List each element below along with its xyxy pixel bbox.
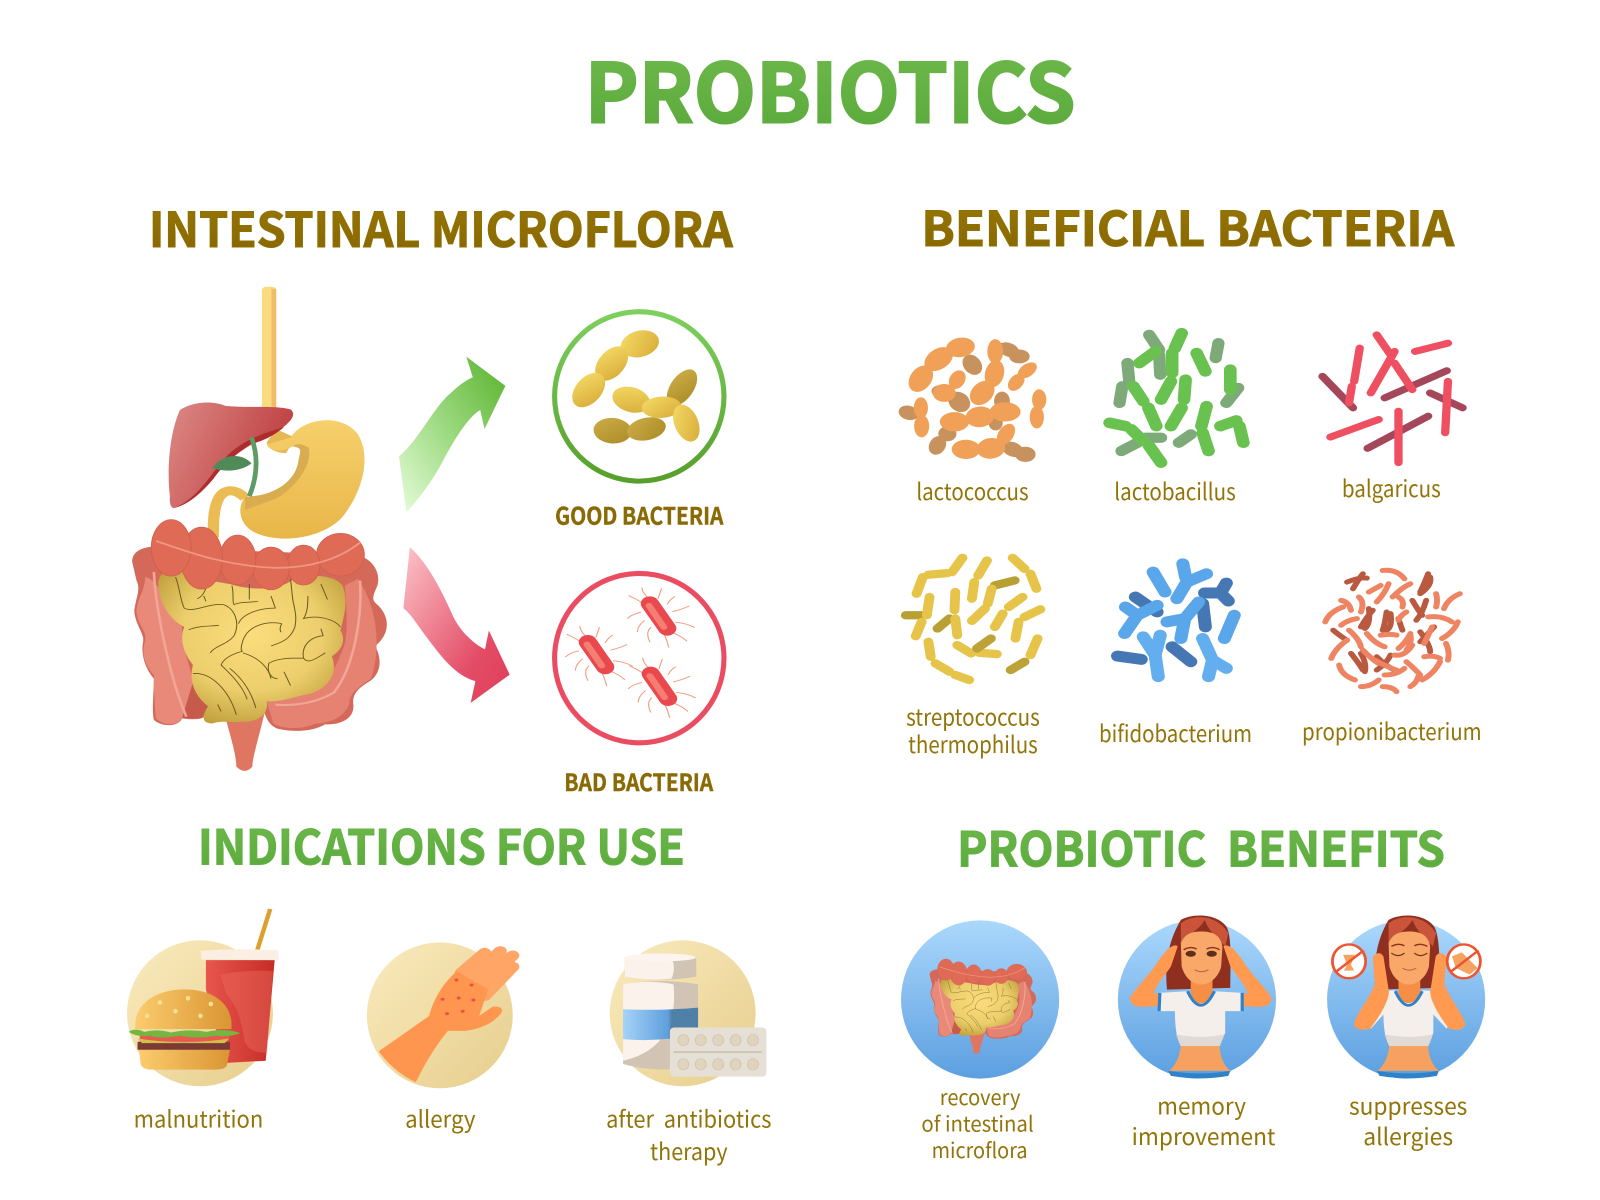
bacteria: lactococcus: [896, 335, 1046, 462]
heading: intestinal microflora: INTESTINAL MICROFLORA: [149, 191, 733, 261]
gallbladder and bile duct: [212, 438, 256, 496]
label: recovery of intestinal microflora: recovery: [940, 1081, 1020, 1112]
heading: indications for use: INDICATIONS FOR USE: [198, 808, 685, 878]
label: allergy: allergy: [405, 1101, 476, 1135]
label: lactococcus: lactococcus: [916, 473, 1029, 507]
heading: probiotic benefits: PROBIOTIC BENEFITS: [957, 810, 1445, 880]
label: suppresses allergies: suppresses: [1349, 1087, 1467, 1121]
indication: antibiotics icon: [610, 940, 766, 1086]
mini intestine: [930, 959, 1036, 1054]
label: recovery of intestinal microflora: [921, 1081, 1034, 1165]
intestinal folds: [176, 577, 340, 715]
label: after antibiotics therapy: therapy: [650, 1133, 728, 1167]
label: after antibiotics therapy: after antibiotics: [606, 1101, 771, 1135]
bacteria: streptococcus thermophilus: [906, 558, 1040, 680]
indication: malnutrition icon: [127, 909, 279, 1086]
bad bacteria ring: [555, 573, 724, 743]
bacteria: propionibacterium: [1325, 570, 1460, 692]
indication: allergy icon: [367, 942, 513, 1088]
good bacteria ring: [555, 312, 724, 481]
rectum: [223, 710, 265, 771]
small intestine: [158, 568, 345, 724]
benefit: suppresses allergies icon: [1327, 916, 1485, 1079]
label: propionibacterium: propionibacterium: [1302, 713, 1482, 747]
good bacteria cells: [565, 325, 704, 446]
transverse colon: [151, 520, 364, 590]
heading: beneficial bacteria: BENEFICIAL BACTERIA: [921, 190, 1454, 260]
beige circle: [127, 940, 273, 1086]
label: bifidobacterium: bifidobacterium: [1099, 715, 1252, 749]
woman touching temples: [1130, 916, 1271, 1078]
title: PROBIOTICS: [585, 27, 1076, 146]
bacteria: balgaricus: [1323, 335, 1463, 463]
arrow: up to good bacteria: [399, 357, 505, 512]
no-food sign: [1332, 944, 1366, 978]
pill bottle and blister pack: [623, 954, 766, 1077]
benefit: recovery icon: [901, 920, 1059, 1079]
label: memory improvement: improvement: [1132, 1118, 1276, 1152]
bacteria: lactobacillus: [1110, 333, 1243, 463]
label: streptococcus thermophilus: [906, 699, 1040, 760]
blue circle: [1118, 920, 1276, 1079]
esophagus: [262, 287, 276, 411]
duodenum: [213, 491, 245, 537]
hand with rash: [379, 951, 513, 1082]
beige circle: [610, 940, 756, 1086]
label: balgaricus: balgaricus: [1342, 470, 1441, 504]
liver: [169, 402, 293, 508]
colon and small intestine: [132, 520, 387, 771]
colon: [132, 547, 387, 731]
arrow: down to bad bacteria: [403, 547, 510, 703]
label: recovery of intestinal microflora: microflora: [932, 1134, 1028, 1165]
label: bad bacteria: BAD BACTERIA: [564, 764, 714, 798]
no-allergy sign: [1447, 944, 1480, 978]
stomach: [240, 420, 364, 539]
digestive system illustration: [132, 287, 387, 771]
benefit: memory icon: [1118, 916, 1276, 1079]
beige circle: [367, 942, 513, 1088]
label: good bacteria: GOOD BACTERIA: [555, 497, 724, 531]
label: malnutrition: malnutrition: [134, 1101, 263, 1135]
label: memory improvement: memory: [1157, 1087, 1246, 1121]
label: suppresses allergies: [1349, 1087, 1467, 1152]
label: recovery of intestinal microflora: of intestinal: [921, 1108, 1034, 1139]
bad bacteria cells: [553, 576, 708, 726]
label: streptococcus thermophilus: streptococcus: [906, 699, 1040, 733]
bacteria: bifidobacterium: [1118, 564, 1234, 677]
label: memory improvement: [1132, 1087, 1276, 1152]
fast food: [129, 909, 279, 1070]
label: after antibiotics therapy: [606, 1101, 771, 1167]
label: streptococcus thermophilus: thermophilus: [908, 726, 1038, 760]
blue circle: [901, 920, 1059, 1079]
label: suppresses allergies: allergies: [1363, 1118, 1453, 1152]
label: lactobacillus: lactobacillus: [1114, 473, 1236, 507]
woman covering ears: [1332, 916, 1480, 1078]
blue circle: [1327, 920, 1485, 1079]
